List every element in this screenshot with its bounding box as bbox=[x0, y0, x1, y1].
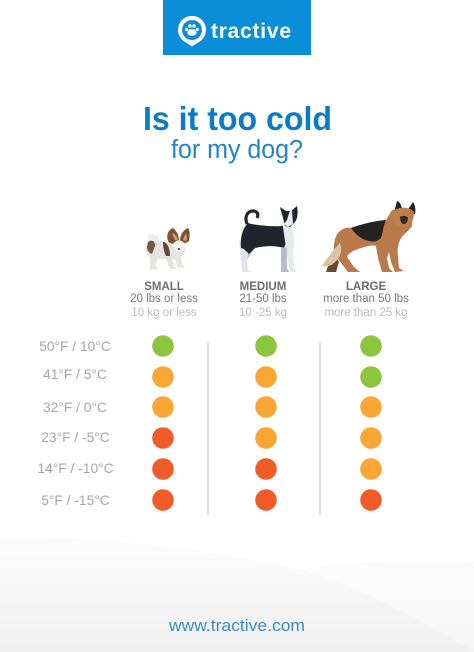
front legs and chest bbox=[283, 224, 297, 272]
column heading: large: more than 50 lbs bbox=[323, 293, 409, 305]
column heading: medium: 10 -25 kg bbox=[239, 307, 287, 319]
logo wordmark: tractive bbox=[211, 20, 291, 43]
black saddle bbox=[351, 220, 386, 242]
tail bbox=[322, 243, 341, 266]
body bbox=[241, 223, 287, 254]
body and legs bbox=[334, 210, 413, 272]
far hind foot bbox=[326, 255, 339, 272]
icon: medium dog bbox=[239, 206, 298, 272]
column heading: small: 10 kg or less bbox=[131, 307, 197, 319]
icon: small dog bbox=[146, 228, 190, 270]
website url: www.tractive.com bbox=[168, 616, 305, 635]
subtitle: for my dog? bbox=[171, 136, 303, 164]
icon: paw location pin bbox=[178, 16, 206, 46]
ears bbox=[394, 201, 402, 212]
column heading: large bbox=[323, 281, 409, 319]
column heading: medium bbox=[239, 281, 287, 319]
tail bbox=[246, 211, 258, 224]
left ear bbox=[167, 228, 179, 244]
temperature labels: 14°F / -10°C bbox=[37, 461, 114, 476]
temperature labels: 23°F / -5°C bbox=[41, 430, 110, 445]
column heading: small: 20 lbs or less bbox=[130, 293, 198, 305]
temperature labels: 41°F / 5°C bbox=[43, 367, 107, 382]
column heading: large: more than 25 kg bbox=[324, 307, 408, 319]
column heading: small bbox=[130, 281, 198, 319]
column heading: large: LARGE bbox=[346, 281, 386, 293]
column heading: small: SMALL bbox=[144, 281, 184, 293]
head bbox=[280, 206, 298, 227]
temperature labels: 5°F / -15°C bbox=[41, 493, 110, 508]
background wave bbox=[0, 536, 474, 652]
rating dots: small bbox=[152, 335, 174, 511]
rating dots: large bbox=[360, 335, 382, 511]
icon: large dog bbox=[322, 201, 415, 272]
temperature labels: 50°F / 10°C bbox=[39, 339, 111, 354]
logo panel bbox=[163, 0, 311, 55]
temperature labels bbox=[37, 339, 114, 508]
right ear bbox=[180, 228, 190, 243]
rating dots: medium bbox=[255, 335, 277, 511]
title: Is it too cold bbox=[143, 101, 332, 138]
head bbox=[392, 208, 414, 228]
temperature labels: 32°F / 0°C bbox=[43, 400, 107, 415]
column heading: medium: 21-50 lbs bbox=[239, 293, 287, 305]
hind legs bbox=[239, 240, 251, 272]
column dividers bbox=[208, 342, 320, 515]
column heading: medium: MEDIUM bbox=[240, 281, 286, 293]
muzzle bbox=[400, 216, 408, 224]
